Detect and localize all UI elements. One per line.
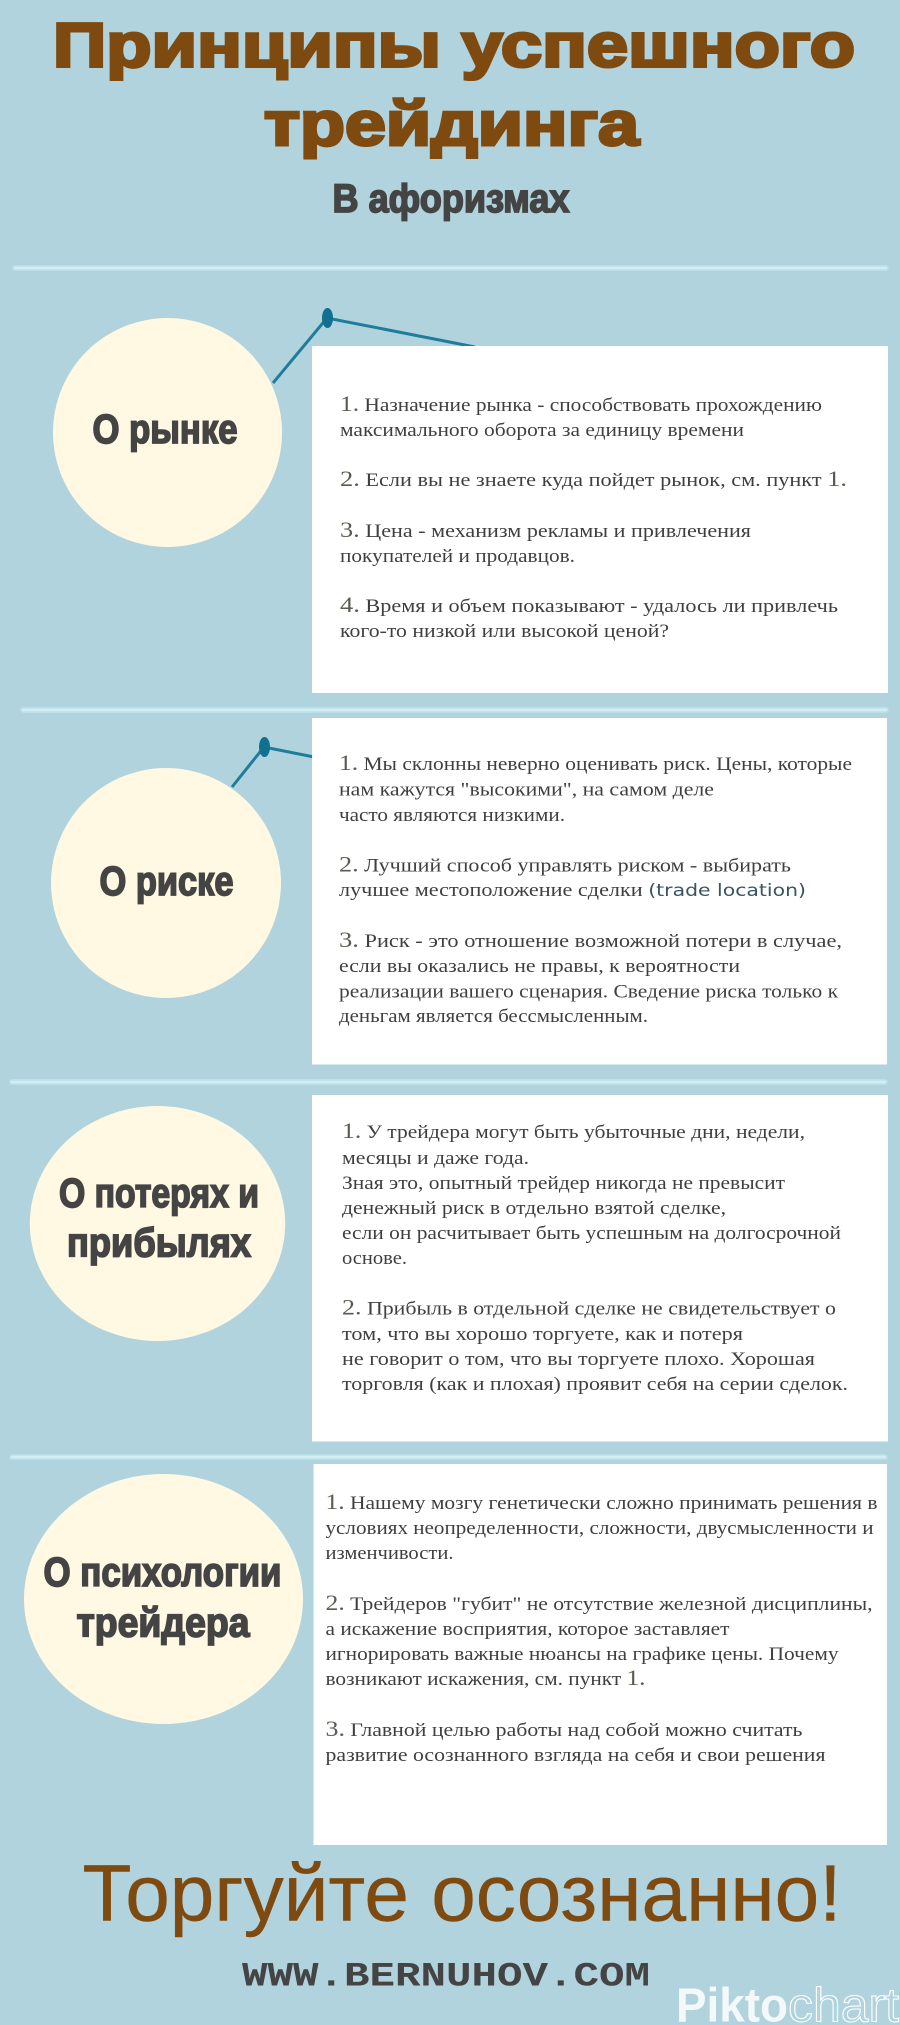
panel text: 4. Время и объем показывают - удалось ли привлечь: [340, 592, 838, 617]
circle label: [44, 1549, 282, 1646]
panel text: 1. Назначение рынка - способствовать прохождению: [340, 391, 822, 416]
connector line with dot: [273, 308, 475, 383]
panel text: основе.: [342, 1249, 407, 1269]
panel text: часто являются низкими.: [339, 806, 565, 826]
circle label: [59, 1170, 259, 1266]
panel text: возникают искажения, см. пункт 1.: [326, 1665, 646, 1690]
section: о потерях и прибылях: [30, 1095, 888, 1442]
website url: WWW.BERNUHOV.COM: [242, 1958, 650, 1996]
circle: о психологии трейдера: [24, 1474, 303, 1724]
white text panel: [314, 1464, 887, 1845]
panel text: 3. Риск - это отношение возможной потери в случае,: [339, 927, 842, 952]
title line 1: Принципы успешного: [53, 12, 855, 80]
circle: о риске: [51, 768, 281, 998]
white text panel: [312, 718, 887, 1064]
panel text: 2. Трейдеров "губит" не отсутствие железной дисциплины,: [326, 1590, 872, 1615]
panel text: если вы оказались не правы, к вероятности: [339, 957, 740, 977]
panel text: кого-то низкой или высокой ценой?: [340, 622, 669, 642]
panel text: месяцы и даже года.: [342, 1149, 529, 1169]
section: о риске: [51, 718, 887, 1064]
panel text: 2. Прибыль в отдельной сделке не свидетельствует о: [342, 1294, 836, 1320]
section: о психологии трейдера: [24, 1464, 887, 1845]
panel text: изменчивости.: [326, 1544, 454, 1564]
closing slogan: Торгуйте осознанно!: [82, 1848, 842, 1938]
piktochart watermark: [676, 1980, 899, 2025]
panel text: если он расчитывает быть успешным на долгосрочной: [342, 1224, 841, 1244]
circle label: О рынке: [92, 406, 238, 452]
panel text: том, что вы хорошо торгуете, как и потеря: [342, 1325, 744, 1345]
circle: о потерях и прибылях: [30, 1106, 285, 1341]
panel text: [342, 1118, 848, 1395]
panel text: [340, 391, 847, 642]
header: [53, 12, 855, 221]
panel text: 2. Если вы не знаете куда пойдет рынок, см. пункт 1.: [340, 466, 847, 491]
white text panel: [312, 1095, 888, 1442]
panel text: максимального оборота за единицу времени: [340, 421, 744, 441]
panel text: [326, 1489, 878, 1766]
white text panel: [312, 346, 888, 693]
panel text: условиях неопределенности, сложности, двусмысленности и: [326, 1519, 874, 1539]
panel text: денежный риск в отдельно взятой сделке,: [342, 1199, 726, 1219]
panel text: развитие осознанного взгляда на себя и свои решения: [326, 1746, 826, 1766]
panel text: а искажение восприятия, которое заставляет: [326, 1620, 730, 1640]
circle: о рынке: [53, 318, 282, 547]
panel text: не говорит о том, что вы торгуете плохо. Хорошая: [342, 1350, 816, 1370]
panel text: 1. Нашему мозгу генетически сложно принимать решения в: [326, 1489, 878, 1514]
panel text: Зная это, опытный трейдер никогда не превысит: [342, 1174, 785, 1194]
circle label: О потерях и: [59, 1170, 259, 1216]
panel text: реализации вашего сценария. Сведение риска только к: [339, 982, 838, 1002]
panel text: нам кажутся "высокими", на самом деле: [339, 780, 714, 800]
title line 2: трейдинга: [264, 90, 640, 159]
circle label: О риске: [100, 858, 234, 904]
panel text: 2. Лучший способ управлять риском - выбирать: [339, 852, 791, 876]
circle label: трейдера: [76, 1600, 251, 1646]
panel text: торговля (как и плохая) проявит себя на серии сделок.: [342, 1375, 848, 1395]
circle label: О психологии: [44, 1549, 282, 1595]
subtitle: В афоризмах: [332, 177, 570, 221]
panel text: покупателей и продавцов.: [340, 547, 575, 567]
panel text: 1. У трейдера могут быть убыточные дни, недели,: [342, 1118, 805, 1143]
panel text: 3. Цена - механизм рекламы и привлечения: [340, 517, 752, 542]
panel text: лучшее местоположение сделки (trade location): [339, 881, 806, 901]
panel text: игнорировать важные нюансы на графике цены. Почему: [326, 1645, 839, 1665]
circle label: прибылях: [67, 1220, 251, 1266]
panel text: [339, 750, 852, 1027]
connector line with dot: [232, 737, 314, 787]
panel text: 3. Главной целью работы над собой можно считать: [326, 1716, 802, 1741]
panel text: 1. Мы склонны неверно оценивать риск. Цены, которые: [339, 750, 852, 775]
section: о рынке: [53, 308, 888, 693]
panel text: деньгам является бессмысленным.: [339, 1007, 648, 1027]
